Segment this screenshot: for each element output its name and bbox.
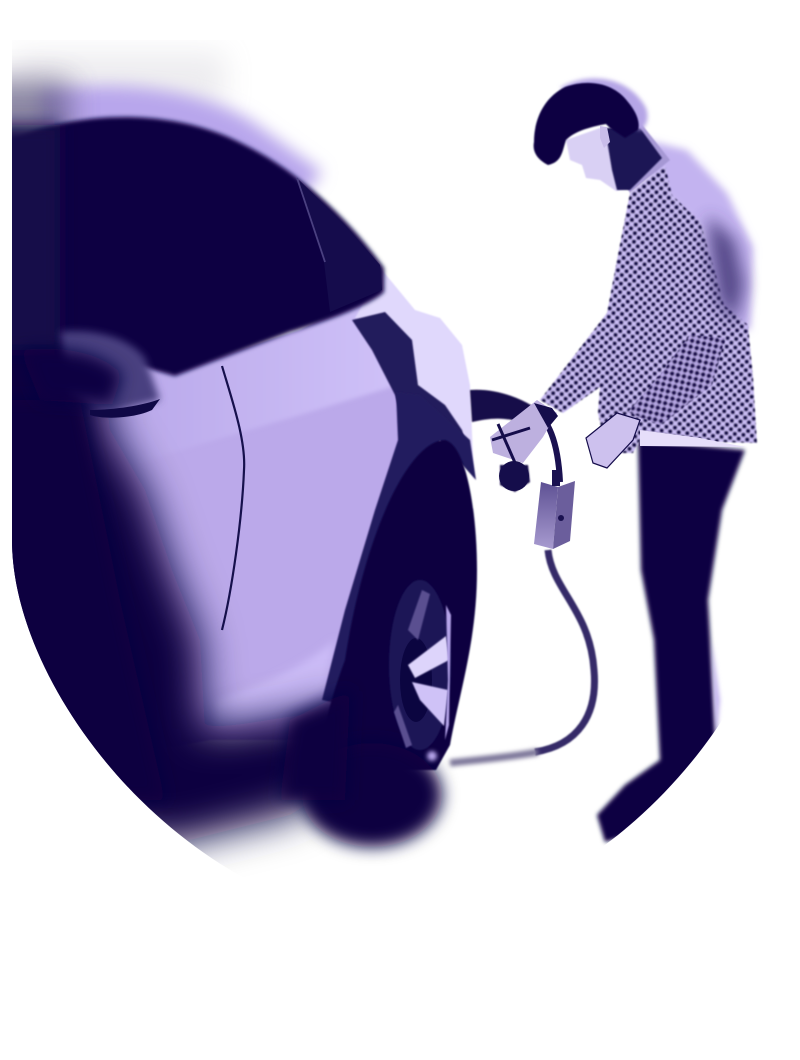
door seam — [222, 366, 244, 630]
connector plug — [499, 461, 529, 491]
face — [566, 128, 628, 191]
man head and hair — [534, 78, 670, 193]
man shirt — [540, 140, 757, 453]
wheel rim — [389, 580, 451, 761]
charging cable — [450, 407, 595, 763]
dark left side shadow — [0, 300, 345, 845]
door handle — [51, 326, 164, 418]
shoulder shadow — [708, 215, 745, 325]
hair — [534, 83, 639, 165]
man hands — [490, 400, 640, 491]
hair light edge — [560, 78, 647, 130]
car and figure masked to shield — [0, 52, 757, 847]
rear quarter highlight — [355, 270, 474, 480]
blurred shoulder — [645, 140, 753, 330]
neck — [628, 125, 670, 194]
car roof haze — [0, 52, 322, 200]
charger handle — [469, 388, 532, 493]
ear — [600, 126, 610, 148]
window glass — [0, 117, 384, 376]
shadow wedge — [351, 311, 464, 441]
checked shirt body — [540, 165, 757, 453]
lower door — [88, 314, 399, 759]
charger box — [534, 470, 575, 549]
car body panels — [88, 272, 474, 759]
man trousers and shoe — [597, 440, 745, 842]
wheel arch and tire — [280, 392, 477, 847]
upper door above crease — [224, 306, 390, 434]
sleeve — [628, 335, 725, 425]
beard — [605, 128, 662, 190]
illustration: person charging an electric car inside a shield-shaped mask — [12, 49, 758, 866]
lower sill highlight — [217, 646, 333, 722]
